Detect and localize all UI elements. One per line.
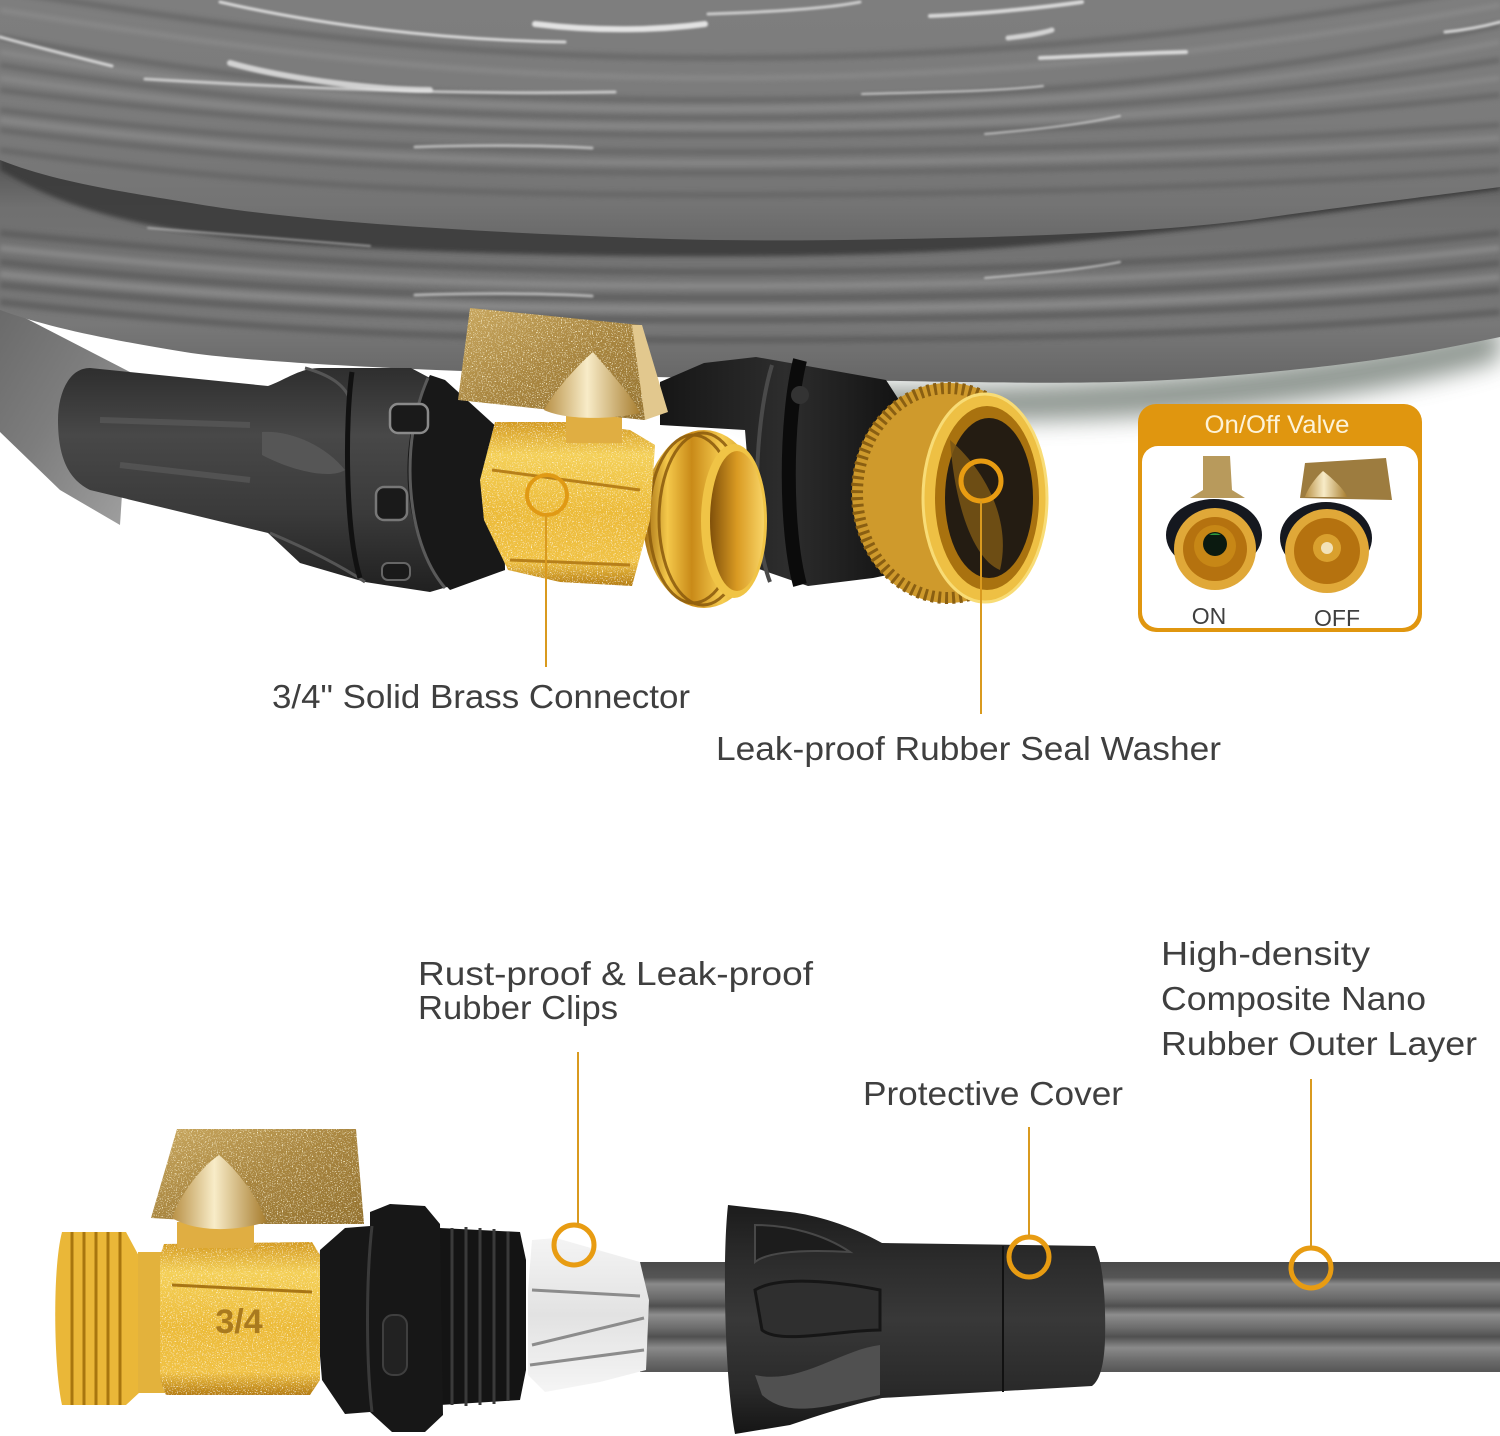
male thread bbox=[643, 430, 765, 608]
hex body bbox=[480, 422, 655, 586]
neck bbox=[138, 1252, 166, 1393]
label off: OFF bbox=[1314, 605, 1360, 631]
lower brass valve bbox=[55, 1222, 320, 1405]
upper valve handle bbox=[458, 308, 668, 420]
callout: protective cover: Protective Cover bbox=[863, 1075, 1123, 1112]
soft shadow under coil bbox=[700, 325, 1500, 421]
glossy highlights bbox=[0, 2, 1500, 296]
label on: ON bbox=[1192, 603, 1226, 629]
hex body bbox=[160, 1242, 320, 1395]
callout: outer layer: Rubber Outer Layer bbox=[1161, 1025, 1477, 1062]
lower protective cover bbox=[725, 1205, 1105, 1434]
upper brass valve bbox=[480, 405, 767, 608]
lower black threaded nut bbox=[317, 1204, 526, 1432]
callout: outer layer: Composite Nano bbox=[1161, 980, 1426, 1017]
callout: rubber clips: Rust-proof & Leak-proof bbox=[418, 955, 814, 992]
knurled gold nut bbox=[852, 383, 1044, 603]
coiled hose background bbox=[0, 0, 1500, 525]
lower valve handle bbox=[151, 1129, 364, 1229]
panel heading: On/Off Valve bbox=[1204, 411, 1350, 439]
callout: protective cover bbox=[863, 1075, 1123, 1277]
callout: brass connector bbox=[272, 475, 690, 715]
callout: brass connector: 3/4" Solid Brass Connector bbox=[272, 678, 690, 715]
upper black protective cover and collar bbox=[58, 368, 505, 592]
callout: rubber seal washer bbox=[716, 461, 1221, 767]
black rear collar bbox=[660, 357, 912, 586]
male thread bbox=[55, 1232, 140, 1405]
stamp 3/4: 3/4 bbox=[215, 1303, 263, 1341]
callout: rubber clips: Rubber Clips bbox=[418, 989, 618, 1026]
second coil bbox=[0, 150, 1500, 383]
callout: outer layer: High-density bbox=[1161, 935, 1371, 972]
icon: valve off bbox=[1280, 458, 1392, 593]
panel: on/off valve bbox=[1138, 404, 1422, 632]
lower hose bbox=[640, 1262, 1500, 1372]
upper rear coupling with gold nut bbox=[660, 357, 1047, 603]
lower hose strip entering cover bbox=[0, 305, 130, 525]
callout: outer layer bbox=[1161, 935, 1477, 1288]
lower white rubber clips bbox=[528, 1238, 649, 1392]
callout: rubber seal washer: Leak-proof Rubber Seal Washer bbox=[716, 730, 1221, 767]
callout: rubber clips bbox=[418, 955, 814, 1265]
top coil bbox=[0, 0, 1500, 240]
coil contact shadow bbox=[0, 150, 1500, 256]
icon: valve on bbox=[1166, 456, 1262, 590]
